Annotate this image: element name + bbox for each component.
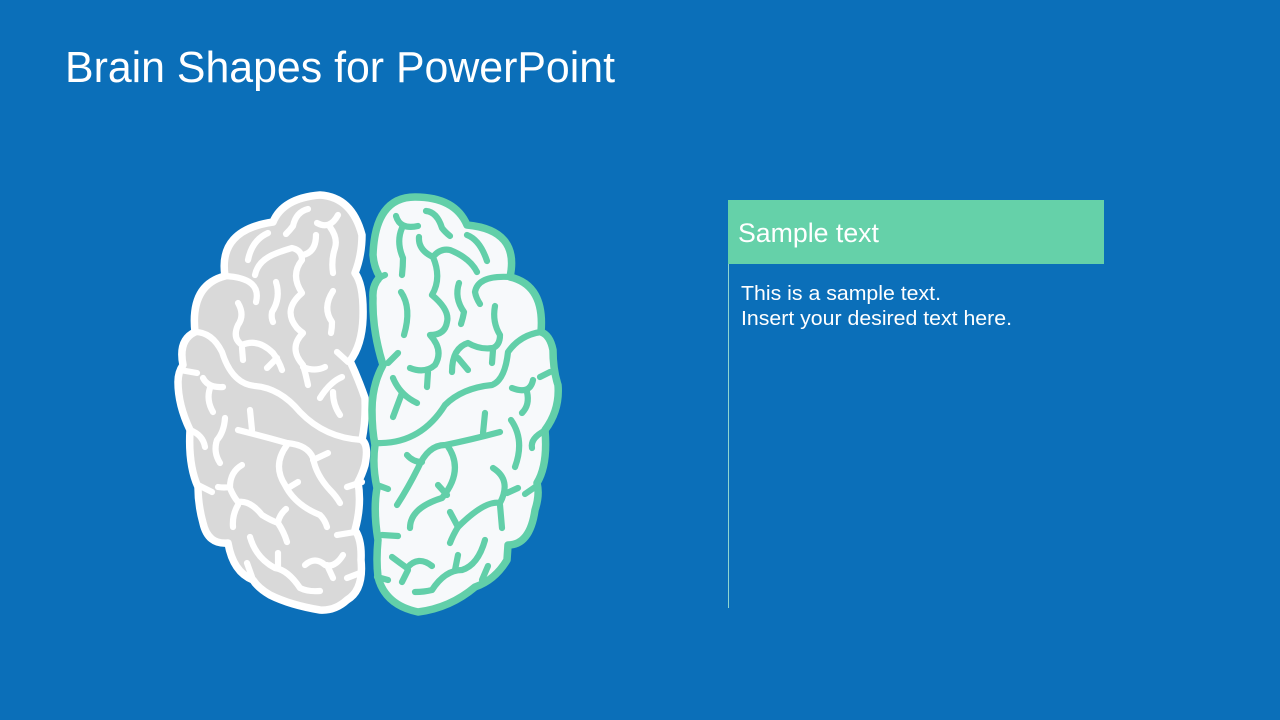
left brain hemisphere <box>178 195 366 610</box>
right brain hemisphere <box>372 197 558 612</box>
panel body text: This is a sample text. <box>741 283 941 305</box>
panel body text <box>741 283 1012 330</box>
panel header: Sample text <box>738 218 880 248</box>
panel body text: Insert your desired text here. <box>741 308 1012 330</box>
title: Brain Shapes for PowerPoint <box>65 43 615 92</box>
panel header <box>728 200 1104 264</box>
panel left rule <box>728 264 729 608</box>
